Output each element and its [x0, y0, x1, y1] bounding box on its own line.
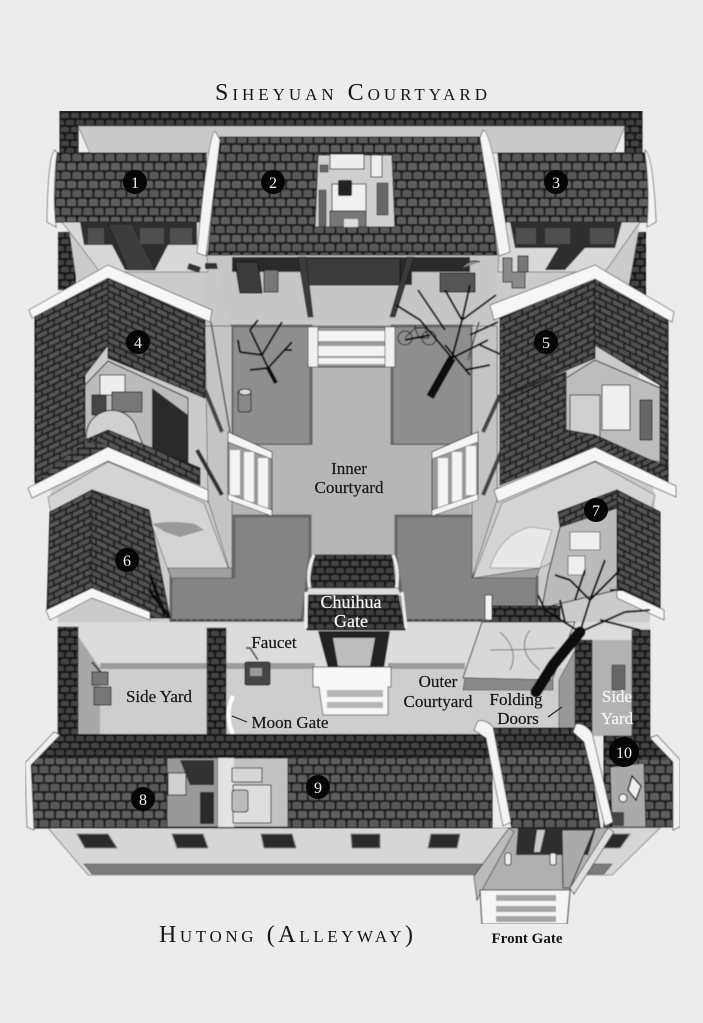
interior cutaway: wing 4 — [85, 361, 188, 465]
main hall porch — [215, 255, 525, 320]
wall divider — [632, 630, 650, 736]
courtyard house drawing — [25, 111, 680, 924]
labels — [126, 459, 634, 947]
interior cutaway: room 8 — [167, 758, 218, 827]
bicycle — [398, 325, 436, 345]
wall divider — [207, 628, 226, 736]
front gate — [474, 721, 614, 924]
roof 3 — [498, 150, 656, 227]
label: moon gate: Moon Gate — [252, 713, 328, 732]
label: chuihua gate: Chuihua — [320, 592, 382, 612]
side yard: left — [78, 636, 100, 736]
label: inner courtyard: Courtyard — [315, 478, 384, 497]
label: outer courtyard: Courtyard — [404, 692, 473, 711]
garden bed: lower left — [171, 516, 310, 621]
chuihua gate — [306, 555, 406, 668]
left steps — [228, 432, 272, 516]
faucet — [245, 648, 270, 685]
marker 1: 1 — [131, 175, 139, 192]
marker 6 — [115, 548, 139, 572]
white gate rail left — [474, 721, 511, 826]
wing 1 facade — [62, 222, 208, 272]
marker 2 — [261, 170, 285, 194]
marker 9 — [306, 775, 330, 799]
trash bin — [238, 389, 251, 412]
front roof — [25, 732, 680, 830]
roof 1 — [47, 150, 206, 227]
front wall — [48, 828, 660, 875]
courtyard paving — [171, 326, 537, 621]
tree: large — [396, 285, 502, 397]
right steps — [432, 432, 478, 516]
garden bed: upper left — [232, 326, 311, 445]
tree: courtyard — [536, 560, 650, 692]
label: outer courtyard: Outer — [419, 672, 458, 691]
side yard: right — [592, 640, 632, 736]
interior cutaway: wing 5 — [566, 360, 660, 462]
marker 7 — [584, 498, 608, 522]
marker 4: 4 — [134, 335, 142, 352]
marker 3: 3 — [552, 175, 560, 192]
wing 4 — [28, 265, 232, 578]
interior cutaway: room 10 — [610, 763, 646, 827]
interior cutaway: wing 7 — [542, 508, 617, 608]
wing 5 — [473, 265, 676, 578]
marker 5 — [534, 330, 558, 354]
subtitle: hutong: Hutong (Alleyway) — [159, 922, 413, 948]
marker 2: 2 — [269, 175, 277, 192]
label: folding doors: Folding — [490, 690, 543, 709]
wall divider — [575, 640, 592, 736]
top steps — [308, 327, 395, 367]
marker 4 — [126, 330, 150, 354]
label: chuihua gate: Gate — [334, 611, 368, 631]
marker 8 — [131, 787, 155, 811]
marker 8: 8 — [139, 792, 147, 809]
label: inner courtyard: Inner — [331, 459, 367, 478]
white eave: wing 5 bottom — [494, 447, 676, 502]
white eave: wing 6 — [46, 588, 150, 620]
wall divider — [58, 627, 78, 736]
label: side yard: Side Yard — [126, 687, 193, 706]
tree: small — [238, 320, 292, 383]
white gate rail right — [573, 724, 613, 826]
outer courtyard floor — [58, 620, 650, 736]
roof 2 — [197, 130, 510, 256]
marker 5: 5 — [542, 335, 550, 352]
interior cutaway: room 9 — [218, 758, 288, 827]
white eave: wing 4 top — [29, 265, 212, 322]
label: folding doors: Doors — [497, 709, 539, 728]
label: side yard right: Side — [602, 687, 632, 706]
marker 10 — [609, 737, 639, 767]
label: side yard right: Yard — [601, 709, 634, 728]
marker 6: 6 — [123, 553, 131, 570]
chuihua steps — [313, 667, 391, 715]
marker 10: 10 — [616, 745, 632, 762]
gate steps — [480, 890, 570, 924]
wing 7 — [542, 490, 664, 620]
garden bed: upper right — [392, 326, 472, 445]
marker 1 — [123, 170, 147, 194]
folding doors — [559, 650, 575, 728]
side terraces — [197, 322, 502, 578]
wing 6 — [46, 490, 170, 620]
white eave: wing 4 bottom — [28, 447, 208, 502]
building floor base — [50, 222, 655, 622]
windows — [77, 834, 630, 848]
title: Siheyuan Courtyard — [215, 80, 487, 106]
marker 7: 7 — [592, 503, 600, 520]
gate roof — [492, 728, 600, 828]
central walkway — [234, 366, 470, 560]
back wall — [58, 111, 646, 295]
garden bed: lower right — [396, 516, 537, 621]
marker 3 — [544, 170, 568, 194]
interior cutaway: main hall — [315, 154, 395, 227]
side room wall with flower bed — [463, 595, 575, 690]
marker 9: 9 — [314, 780, 322, 797]
number markers — [115, 170, 639, 811]
white eave: wing 5 top — [490, 265, 674, 322]
label: faucet: Faucet — [251, 633, 297, 652]
label: front gate: Front Gate — [492, 931, 563, 947]
moon gate — [228, 696, 233, 734]
leader lines — [232, 707, 562, 722]
wing 3 facade — [188, 222, 640, 272]
